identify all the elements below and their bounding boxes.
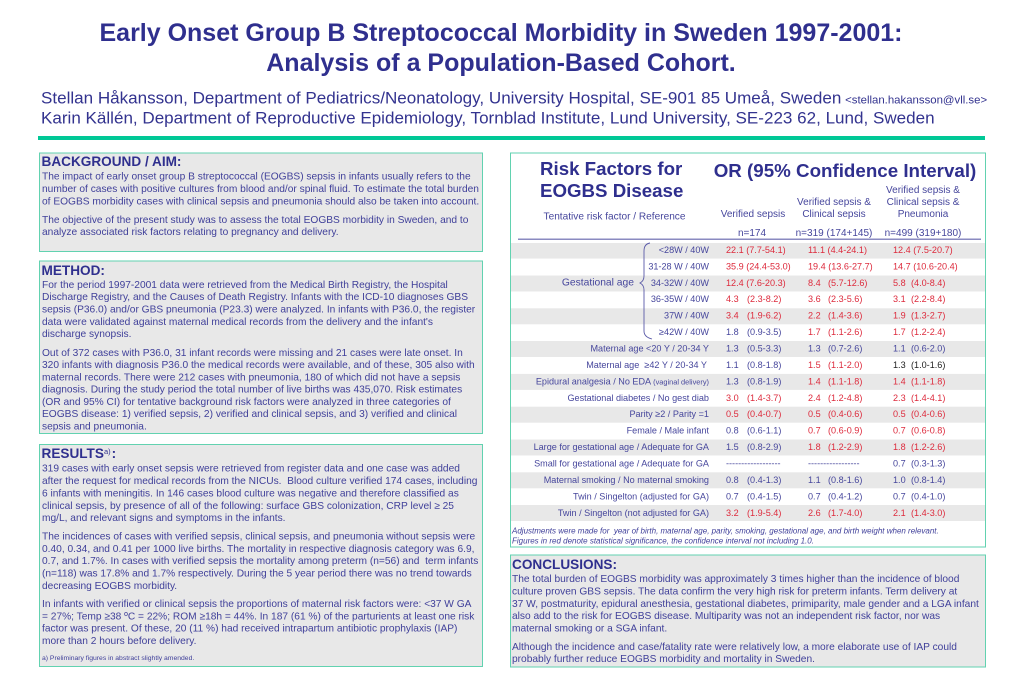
column headings: n=174 [738, 228, 766, 239]
values: verified sepsis: (1.4-3.7) [747, 393, 781, 403]
values: verified and clinical sepsis: (0.6-0.9) [828, 426, 862, 436]
values: verified sepsis: 35.9 (24.4-53.0) [726, 262, 791, 272]
values: verified, clinical sepsis and pneumonia: 1.4 [893, 376, 906, 386]
values: verified, clinical sepsis and pneumonia: 1.1 [893, 344, 906, 354]
values: verified and clinical sepsis: (1.7-4.0) [828, 508, 862, 518]
table title: EOGBS Disease [540, 180, 683, 201]
values: verified and clinical sepsis: 2.4 [808, 393, 821, 403]
panel: method: Discharge Registry, and the Causes of Death Registry. Infants with the ICD-10 diagnoses GBS [42, 292, 468, 303]
values: verified and clinical sepsis: 11.1 (4.4-24.1) [808, 245, 867, 255]
values: verified sepsis [726, 245, 791, 518]
values: verified, clinical sepsis and pneumonia: (1.2-2.4) [911, 327, 945, 337]
panel: results: 6 infants with meningitis. In 146 cases blood culture was negative and therefore classified as [42, 488, 459, 500]
panel: background and aim: The objective of the present study was to assess the total EOGBS morbidity in Sweden, and to [42, 215, 469, 226]
values: verified, clinical sepsis and pneumonia: 12.4 (7.5-20.7) [893, 245, 953, 255]
panel: method: data were validated against maternal medical records from the delivery and the infant's [42, 317, 433, 328]
column headings: Verified sepsis & [886, 185, 960, 196]
panel: results: factor was present. Of these, 20 (11 %) had received intrapartum antibiotic prophylaxis (IAP) [42, 624, 457, 634]
row labels: Parity ≥2 / Parity =1 [629, 409, 709, 419]
values: verified sepsis: 1.8 [726, 327, 739, 337]
values: verified sepsis: 1.5 [726, 442, 739, 452]
panel: results: 0.7, and 1.7%. In cases with verified sepsis the mortality among preterm (n=56) and term infants [42, 556, 478, 567]
panel: method: discharge synopsis. [42, 329, 131, 340]
values: verified and clinical sepsis: (2.3-5.6) [828, 294, 862, 304]
values: verified and clinical sepsis: 2.6 [808, 508, 821, 518]
brace: gestational age [640, 243, 652, 339]
panel: method: maternal records. There were 212 cases with pneumonia, 180 of which did not have a sepsis [42, 372, 460, 384]
heading: results: a) [104, 447, 111, 456]
values: verified sepsis: 12.4 (7.6-20.3) [726, 278, 786, 288]
row labels: 37W / 40W [664, 310, 709, 320]
column headings: Pneumonia [898, 209, 949, 220]
panel: results: The incidences of cases with verified sepsis, clinical sepsis, and pneumonia without sepsis were [42, 532, 476, 542]
values: verified and clinical sepsis: (1.2-2.9) [828, 442, 862, 452]
values: verified sepsis: (0.6-1.1) [747, 426, 781, 436]
panel: method [40, 261, 482, 434]
values: verified and clinical sepsis: 1.1 [808, 475, 821, 485]
values: verified sepsis: 4.3 [726, 294, 739, 304]
values: verified and clinical sepsis: 3.6 [808, 294, 821, 304]
values: verified and clinical sepsis: (1.1-1.8) [828, 376, 862, 386]
authors and affiliations: Karin Källén, Department of Reproductive Epidemiology, Tornblad Institute, Lund University, SE-223 62, Lund, Sweden [41, 108, 935, 128]
panel: method: For the period 1997-2001 data were retrieved from the Medical Birth Registry, the Hospital [42, 280, 448, 291]
panel: results: after the request for medical records from the NICUs. Blood culture verified 174 cases, including [42, 476, 478, 487]
heading: results: : [112, 446, 116, 461]
values: verified sepsis: 1.3 [726, 376, 739, 386]
values: verified and clinical sepsis: 1.5 [808, 360, 821, 370]
panel: results: 319 cases with early onset sepsis were retrieved from register data and one case was added [42, 464, 460, 474]
values: verified sepsis: (0.5-3.3) [747, 344, 781, 354]
values: verified, clinical sepsis and pneumonia: (0.3-1.3) [911, 458, 945, 468]
values: verified and clinical sepsis: (1.1-2.0) [828, 360, 862, 370]
values: verified sepsis: (0.9-3.5) [747, 327, 781, 337]
values: verified sepsis: 3.0 [726, 393, 739, 403]
values: verified and clinical sepsis: 1.7 [808, 327, 821, 337]
values: verified, clinical sepsis and pneumonia: 1.9 [893, 310, 906, 320]
values: verified sepsis: 1.3 [726, 344, 739, 354]
panel: conclusions: maternal smoking or a SGA infant. [512, 624, 667, 634]
panel: results: In infants with verified or clinical sepsis the proportions of maternal risk factors were: <37 W GA [42, 599, 472, 610]
panel: background and aim: number of cases with positive cultures from blood and/or spinal fluid. To estimate the total burden [42, 184, 479, 195]
values: verified sepsis: (0.4-1.5) [747, 492, 781, 502]
column headings: Clinical sepsis & [887, 197, 960, 208]
panel: method: EOGBS disease: 1) verified sepsis, 2) verified and clinical sepsis, and 3) verified and clinical [42, 409, 457, 420]
panel: results: more than 2 hours before delivery. [42, 636, 196, 647]
panel: method: 320 infants with diagnosis P36.0 the medical records were available, and of these, 305 also with [42, 360, 475, 371]
values: verified, clinical sepsis and pneumonia: 0.7 [893, 458, 906, 468]
table title: Risk Factors for [540, 158, 682, 179]
panel: results: clinical sepsis, by presence of all of the following: surface GBS colonization, CRP level ≥ 25 [42, 501, 454, 512]
row bands [511, 243, 985, 521]
title: Analysis of a Population-Based Cohort. [266, 49, 736, 77]
values: verified sepsis: 0.7 [726, 492, 739, 502]
values: verified sepsis: (2.3-8.2) [747, 294, 781, 304]
column headings: Verified sepsis & [797, 197, 871, 208]
values: verified, clinical sepsis and pneumonia: 3.1 [893, 294, 906, 304]
values: verified, clinical sepsis and pneumonia [893, 245, 958, 518]
row labels: Maternal age <20 Y / 20-34 Y [590, 344, 709, 354]
values: verified and clinical sepsis: (1.1-2.6) [828, 327, 862, 337]
row labels: Gestational age [562, 278, 634, 288]
row labels: 31-28 W / 40W [648, 262, 709, 272]
column headings: Verified sepsis [721, 209, 785, 220]
heading: background: BACKGROUND / AIM: [42, 154, 181, 169]
row labels: Maternal age ≥42 Y / 20-34 Y [586, 360, 707, 370]
values: verified sepsis: 3.2 [726, 508, 739, 518]
values: verified and clinical sepsis: (0.8-1.6) [828, 475, 862, 485]
panel: conclusions: Although the incidence and case/fatality rate were relatively low, a more elaborate use of IAP could [512, 642, 957, 653]
values: verified and clinical sepsis [808, 245, 873, 518]
row labels: ≥42W / 40W [659, 327, 709, 337]
values: verified sepsis: (0.8-1.9) [747, 376, 781, 386]
values: verified, clinical sepsis and pneumonia: (1.3-2.7) [911, 310, 945, 320]
table footnote [511, 526, 939, 546]
values: verified and clinical sepsis: 1.8 [808, 442, 821, 452]
values: verified and clinical sepsis: 1.3 [808, 344, 821, 354]
values: verified, clinical sepsis and pneumonia: (1.4-4.1) [911, 393, 945, 403]
panel: background and aim: of EOGBS morbidity cases with clinical sepsis and pneumonia should also be taken into account. [42, 196, 479, 208]
values: verified, clinical sepsis and pneumonia: 0.5 [893, 409, 906, 419]
values: verified sepsis: (1.9-6.2) [747, 310, 781, 320]
table title [540, 158, 683, 201]
values: verified sepsis: (0.4-0.7) [747, 409, 781, 419]
values: verified, clinical sepsis and pneumonia: 0.7 [893, 492, 906, 502]
values: verified sepsis: (0.8-1.8) [747, 360, 781, 370]
panel: results [40, 444, 482, 666]
column headings: n=319 (174+145) [796, 228, 872, 239]
values: verified and clinical sepsis: 0.5 [808, 409, 821, 419]
table footnote: Adjustments were made for year of birth, maternal age, parity, smoking, gestational age, and birth weight when relevant. [511, 526, 939, 536]
panel: conclusions: probably further reduce EOGBS morbidity and mortality in Sweden. [512, 654, 815, 665]
column headings: Tentative risk factor / Reference [544, 212, 686, 222]
authors and affiliations [41, 88, 987, 128]
values: verified, clinical sepsis and pneumonia: (0.4-0.6) [911, 409, 945, 419]
table heading: OR: OR (95% Confidence Interval) [714, 160, 976, 181]
values: verified, clinical sepsis and pneumonia: 1.7 [893, 327, 906, 337]
panel: background and aim [40, 153, 482, 252]
row labels: Female / Male infant [627, 426, 709, 436]
values: verified, clinical sepsis and pneumonia: (1.2-2.6) [911, 442, 945, 452]
values: verified sepsis: 3.4 [726, 310, 739, 320]
panel: method: sepsis (P36.0) and/or GBS pneumonia (P23.3) were analyzed. In infants with P36.0, the register [42, 304, 476, 316]
row labels [534, 245, 710, 518]
values: verified, clinical sepsis and pneumonia: (1.1-1.8) [911, 376, 945, 386]
values: verified and clinical sepsis: 19.4 (13.6-27.7) [808, 262, 873, 272]
row labels: Large for gestational age / Adequate for GA [534, 442, 710, 452]
panel: conclusions: The total burden of EOGBS morbidity was approximately 3 times higher than the incidence of blood [512, 574, 960, 585]
values: verified sepsis: 0.5 [726, 409, 739, 419]
values: verified sepsis: 22.1 (7.7-54.1) [726, 245, 786, 255]
values: verified and clinical sepsis: (1.4-3.6) [828, 310, 862, 320]
row labels: Gestational diabetes / No gest diab [567, 393, 709, 403]
values: verified, clinical sepsis and pneumonia: 5.8 [893, 278, 906, 288]
row labels: Twin / Singelton (adjusted for GA) [573, 492, 709, 502]
row labels: Small for gestational age / Adequate for GA [534, 458, 710, 468]
column headings [544, 185, 961, 239]
panel: results: = 27%; Temp ≥38 ºC = 22%; ROM ≥18h = 44%. In 187 (61 %) of the parturients at least one risk [42, 612, 475, 622]
values: verified and clinical sepsis: (1.2-4.8) [828, 393, 862, 403]
values: verified, clinical sepsis and pneumonia: 1.8 [893, 442, 906, 452]
heading: conclusions: CONCLUSIONS: [512, 557, 617, 572]
authors and affiliations: Stellan Håkansson, Department of Pediatrics/Neonatology, University Hospital, SE-901 85 Umeå, Sweden <stellan.hakansson@vll.se> [41, 88, 987, 108]
title: Early Onset Group B Streptococcal Morbidity in Sweden 1997-2001: [99, 19, 903, 47]
column headings: n=499 (319+180) [885, 228, 961, 239]
values: verified, clinical sepsis and pneumonia: 1.3 [893, 360, 906, 370]
heading: results: RESULTS [42, 446, 104, 461]
values: verified sepsis: 0.8 [726, 426, 739, 436]
panel: conclusions: culture proven GBS sepsis. The data confirm the very high risk for preterm infants. Term delivery at [512, 586, 957, 598]
values: verified and clinical sepsis: ----------------- [808, 458, 859, 468]
values: verified and clinical sepsis: 0.7 [808, 426, 821, 436]
values: verified sepsis: (0.4-1.3) [747, 475, 781, 485]
values: verified, clinical sepsis and pneumonia: 14.7 (10.6-20.4) [893, 262, 958, 272]
row labels: 36-35W / 40W [651, 294, 709, 304]
values: verified, clinical sepsis and pneumonia: (0.6-0.8) [911, 426, 945, 436]
panel: results: mg/L, and relevant signs and symptoms in the infants. [42, 513, 286, 524]
values: verified sepsis: ------------------ [726, 458, 781, 468]
values: verified and clinical sepsis: 1.4 [808, 376, 821, 386]
panel: results: 0.40, 0.34, and 0.41 per 1000 live births. The mortality in respective diagnosis category was 6.9, [42, 544, 474, 555]
values: verified and clinical sepsis: (0.4-0.6) [828, 409, 862, 419]
values: verified and clinical sepsis: 0.7 [808, 492, 821, 502]
row labels: <28W / 40W [659, 245, 709, 255]
table footnote: Figures in red denote statistical significance, the confidence interval not including 1.0. [512, 536, 814, 546]
values: verified, clinical sepsis and pneumonia: 1.0 [893, 475, 906, 485]
panel: method: diagnosis. During the study period the total number of live births was 435,070. Risk estimates [42, 384, 462, 396]
title [99, 19, 903, 77]
values: verified sepsis: (0.8-2.9) [747, 442, 781, 452]
panel: background and aim: analyze associated risk factors relating to pregnancy and delivery. [42, 227, 339, 238]
row labels: Twin / Singelton (not adjusted for GA) [558, 508, 709, 518]
values: verified and clinical sepsis: (0.7-2.6) [828, 344, 862, 354]
panel: background and aim: The impact of early onset group B streptococcal (EOGBS) sepsis in infants usually refers to the [42, 172, 471, 182]
heading: method: METHOD: [42, 263, 105, 278]
panel: method: Out of 372 cases with P36.0, 31 infant records were missing and 21 cases were late onset. In [42, 348, 463, 359]
panel: results: a) Preliminary figures in abstract slightly amended. [42, 655, 194, 662]
values: verified, clinical sepsis and pneumonia: (1.4-3.0) [911, 508, 945, 518]
panel: method: sepsis and pneumonia. [42, 422, 147, 432]
values: verified, clinical sepsis and pneumonia: 2.3 [893, 393, 906, 403]
values: verified, clinical sepsis and pneumonia: (0.6-2.0) [911, 344, 945, 354]
values: verified, clinical sepsis and pneumonia: (0.4-1.0) [911, 492, 945, 502]
values: verified, clinical sepsis and pneumonia: 2.1 [893, 508, 906, 518]
panel: results: decreasing EOGBS morbidity. [42, 581, 177, 592]
panel: conclusions: also add to the risk for EOGBS disease. Multiparity was not an independent risk factor, nor was [512, 611, 940, 622]
values: verified, clinical sepsis and pneumonia: (0.8-1.4) [911, 475, 945, 485]
values: verified and clinical sepsis: (5.7-12.6) [828, 278, 867, 288]
values: verified, clinical sepsis and pneumonia: (2.2-8.4) [911, 294, 945, 304]
values: verified sepsis: 0.8 [726, 475, 739, 485]
values: verified, clinical sepsis and pneumonia: 0.7 [893, 426, 906, 436]
values: verified sepsis: 1.1 [726, 360, 739, 370]
values: verified, clinical sepsis and pneumonia: (1.0-1.6) [911, 360, 945, 370]
column headings: Clinical sepsis [802, 209, 866, 220]
row labels: Epidural analgesia / No EDA (vaginal delivery) [536, 376, 709, 386]
panel: conclusions: 37 W, postmaturity, epidural anesthesia, gestational diabetes, primiparity, male gender and a LGA infant [512, 599, 979, 610]
panel: conclusions [510, 555, 986, 667]
values: verified, clinical sepsis and pneumonia: (4.0-8.4) [911, 278, 945, 288]
panel: risk factor table [510, 153, 986, 547]
panel: method: (OR and 95% CI) for tentative background risk factors were analyzed in three categories of [42, 397, 451, 408]
values: verified sepsis: (1.9-5.4) [747, 508, 781, 518]
values: verified and clinical sepsis: 2.2 [808, 310, 821, 320]
row labels: Maternal smoking / No maternal smoking [544, 475, 709, 485]
values: verified and clinical sepsis: (0.4-1.2) [828, 492, 862, 502]
values: verified and clinical sepsis: 8.4 [808, 278, 821, 288]
panel: results: (n=118) was 17.8% and 1.7% respectively. During the 5 year period there was no trend towards [42, 568, 472, 580]
row labels: 34-32W / 40W [651, 278, 709, 288]
